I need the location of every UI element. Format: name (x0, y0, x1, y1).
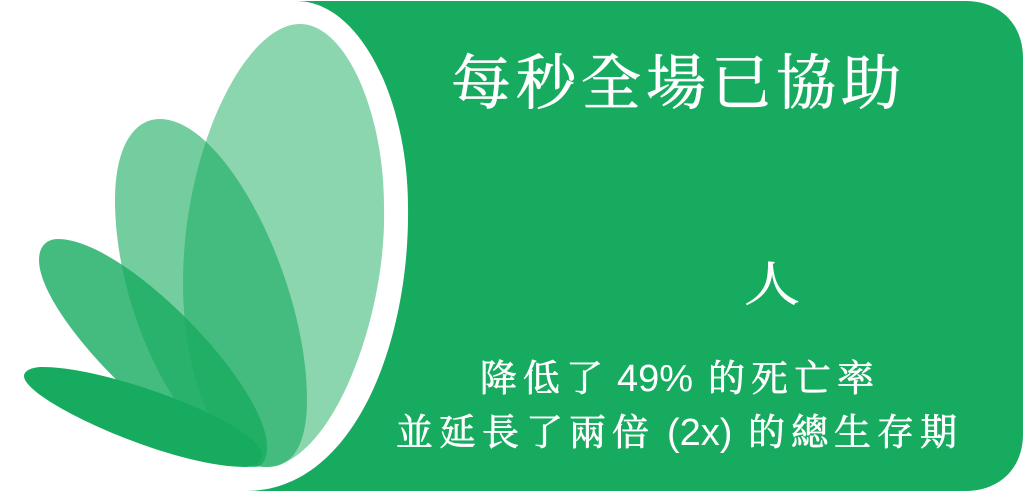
petal: second (115, 119, 307, 467)
stat line: mortality (480, 358, 874, 400)
stat line: mortality: 49% (617, 358, 693, 400)
stat line: survival: (2x) (667, 412, 732, 454)
stat line: survival: 的總生存期 (748, 412, 957, 453)
petal: tallest (183, 24, 384, 467)
stat line: survival (396, 412, 957, 454)
petal: third (39, 239, 267, 467)
stat line: mortality: 降低了 (480, 358, 603, 399)
stat line: mortality: 的死亡率 (708, 358, 874, 399)
stat line: survival: 並延長了兩倍 (396, 412, 649, 453)
petal: lowest (24, 367, 262, 467)
icon: leaf petals (24, 24, 384, 467)
unit label: 人 (744, 259, 800, 312)
panel: green background (246, 1, 1023, 491)
title: 每秒全場已協助 (451, 50, 901, 117)
